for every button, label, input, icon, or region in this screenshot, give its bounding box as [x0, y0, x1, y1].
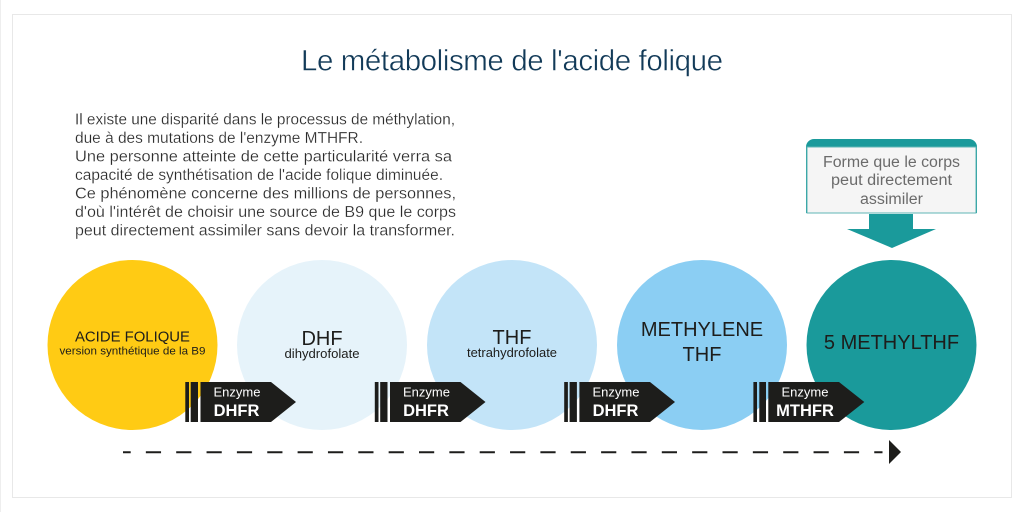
circle: DHF: dihydrofolate [284, 347, 360, 361]
intro text block: d'où l'intérêt de choisir une source de B9 que le corps [75, 204, 456, 221]
circle: 5 methylthf: 5 METHYLTHF [824, 332, 959, 354]
intro text block: peut directement assimiler sans devoir la transformer. [75, 222, 455, 240]
title: Le métabolisme de l'acide folique [301, 44, 723, 78]
callout arrow [847, 214, 936, 248]
enzyme arrow: DHFR 1: DHFR [214, 402, 259, 420]
circle: acide folique [48, 260, 218, 430]
callout: directly absorbable form: Forme que le corps [823, 154, 960, 171]
callout: directly absorbable form: peut directement [831, 172, 953, 189]
circle: 5 methylthf [806, 260, 976, 430]
circle: DHF [237, 260, 407, 430]
enzyme arrow: MTHFR: Enzyme [782, 384, 828, 400]
enzyme arrow: MTHFR [753, 382, 864, 422]
callout: directly absorbable form [806, 139, 977, 213]
circle: THF: THF [493, 327, 531, 349]
enzyme arrow: DHFR 2: Enzyme [403, 384, 450, 400]
intro text block: Une personne atteinte de cette particularité verra sa [75, 148, 452, 166]
circle: DHF: DHF [301, 328, 343, 350]
enzyme arrow: DHFR 1 [185, 382, 296, 422]
intro text block: Il existe une disparité dans le processus de méthylation, [75, 112, 455, 128]
enzyme arrow: DHFR 1: Enzyme [214, 384, 260, 400]
intro text block [75, 112, 456, 240]
intro text block: due à des mutations de l'enzyme MTHFR. [75, 130, 363, 147]
enzyme arrow: DHFR 3 [564, 382, 675, 422]
enzyme arrow: DHFR 3: DHFR [593, 402, 638, 420]
circle: methylene THF: METHYLENE [641, 319, 763, 341]
circle: THF [427, 260, 597, 430]
circle: acide folique: version synthétique de la B9 [60, 346, 206, 358]
intro text block: Ce phénomène concerne des millions de personnes, [75, 186, 456, 202]
circle: acide folique: ACIDE FOLIQUE [75, 330, 190, 346]
dashed timeline arrow [123, 440, 901, 464]
callout: directly absorbable form: assimiler [860, 191, 923, 208]
enzyme arrow: DHFR 2 [375, 382, 486, 422]
circle: methylene THF: THF [683, 344, 721, 366]
intro text block: capacité de synthétisation de l'acide folique diminuée. [75, 167, 443, 184]
enzyme arrow: DHFR 3: Enzyme [593, 384, 639, 400]
circle: methylene THF [617, 260, 787, 430]
enzyme arrow: MTHFR: MTHFR [776, 402, 834, 420]
circle: THF: tetrahydrofolate [467, 346, 557, 360]
enzyme arrow: DHFR 2: DHFR [403, 402, 449, 420]
